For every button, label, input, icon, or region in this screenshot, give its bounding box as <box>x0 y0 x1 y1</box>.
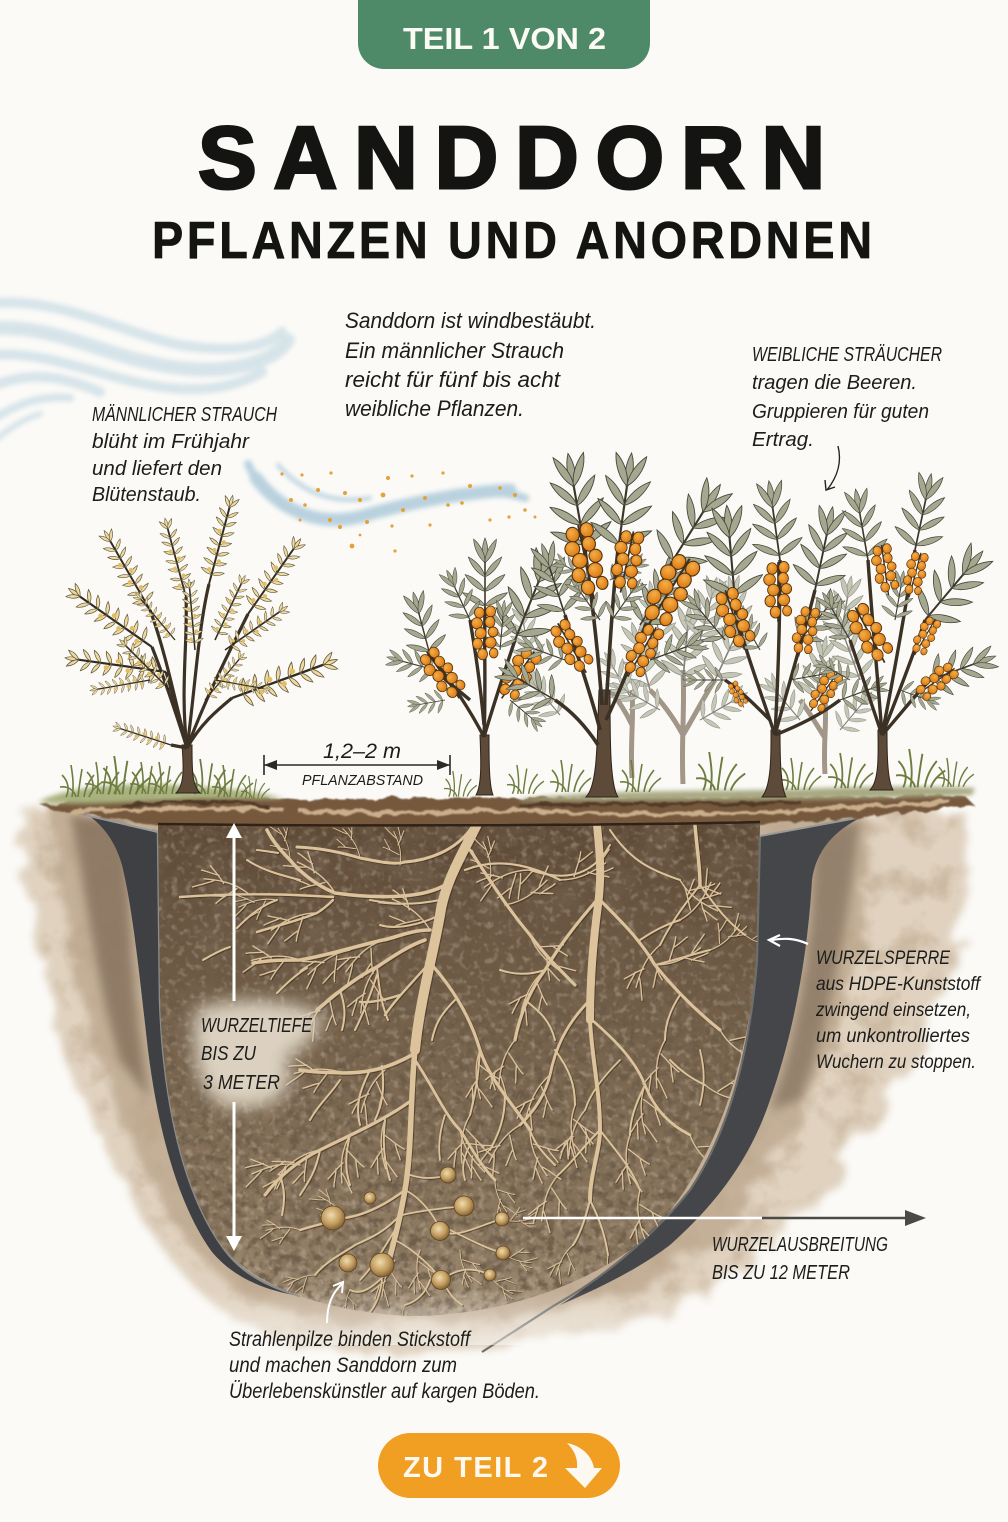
root depth label: WURZELTIEFE <box>201 1015 313 1037</box>
text: wind pollination note: Ein männlicher Strauch <box>345 338 564 363</box>
button: to part 2: ZU TEIL 2 <box>403 1452 548 1484</box>
fine rootlets <box>190 817 781 1322</box>
spacing dimension <box>264 740 450 789</box>
button: to part 2 <box>378 1433 620 1498</box>
badge: part 1 of 2 <box>358 0 650 69</box>
arrow: to root barrier <box>769 935 808 946</box>
soil shadow beside barriers <box>70 815 860 1110</box>
text: nodules note: Überlebenskünstler auf kargen Böden. <box>229 1380 540 1403</box>
text: root barrier note <box>815 948 982 1073</box>
spacing dimension: PFLANZABSTAND <box>302 772 423 789</box>
outer soil grain <box>34 811 959 1336</box>
text: male shrub note: und liefert den <box>92 458 222 480</box>
bottom fade of pit <box>150 1290 710 1345</box>
shrub 2 <box>488 448 747 797</box>
text: root barrier note: zwingend einsetzen, <box>815 1000 971 1021</box>
shrub 1 <box>382 538 580 795</box>
text: nodules note: und machen Sanddorn zum <box>229 1354 457 1377</box>
root depth label <box>194 823 321 1251</box>
text: female shrubs note: Gruppieren für guten <box>752 401 929 423</box>
text: wind pollination note: reicht für fünf bis acht <box>345 367 561 392</box>
outer soil wash <box>22 810 968 1352</box>
inner soil wash <box>52 812 869 1323</box>
background shrubs <box>503 572 885 784</box>
arrow: root spread <box>523 1210 926 1226</box>
grass tufts <box>60 749 974 798</box>
ground surface <box>38 784 975 826</box>
text: root spread: BIS ZU 12 METER <box>712 1262 850 1284</box>
text: root barrier note: WURZELSPERRE <box>816 948 950 969</box>
text: nodules note: Strahlenpilze binden Stickstoff <box>229 1328 472 1351</box>
root depth label: BIS ZU <box>201 1043 256 1065</box>
text: female shrubs note: WEIBLICHE STRÄUCHER <box>752 344 942 366</box>
nodule branches <box>370 1175 503 1312</box>
soil grain texture <box>150 815 770 1325</box>
middle and right branches <box>415 830 745 1255</box>
text: root barrier note: aus HDPE-Kunststoff <box>816 974 982 995</box>
left branches <box>180 830 470 1292</box>
text: nodules note <box>229 1328 540 1403</box>
text: root barrier note: Wuchern zu stoppen. <box>816 1052 976 1073</box>
subtitle: PFLANZEN UND ANORDNEN <box>152 212 872 270</box>
title: SANDDORN <box>198 108 825 207</box>
spacing dimension: 1,2–2 m <box>323 740 401 763</box>
text: female shrubs note <box>752 344 942 451</box>
root depth label: 3 METER <box>203 1072 280 1094</box>
badge: part 1 of 2: TEIL 1 VON 2 <box>403 21 606 56</box>
text: male shrub note <box>92 404 277 506</box>
main roots <box>385 822 700 1275</box>
text: wind pollination note <box>345 308 596 421</box>
text: female shrubs note: Ertrag. <box>752 429 814 451</box>
wind swirl top left <box>0 303 288 440</box>
text: male shrub note: MÄNNLICHER STRAUCH <box>92 404 277 426</box>
nitrogen nodules <box>321 1167 510 1290</box>
text: root spread: WURZELAUSBREITUNG <box>712 1234 888 1256</box>
text: wind pollination note: weibliche Pflanzen. <box>345 396 524 421</box>
male shrub <box>61 492 343 793</box>
text: root spread <box>712 1234 888 1284</box>
arrow: to nodules <box>327 1282 343 1323</box>
text: root barrier note: um unkontrolliertes <box>816 1026 970 1047</box>
shrub 4 <box>807 468 1006 790</box>
soil pit <box>158 822 760 1316</box>
text: female shrubs note: tragen die Beeren. <box>752 372 917 394</box>
text: wind pollination note: Sanddorn ist windbestäubt. <box>345 308 596 333</box>
wind with pollen <box>248 464 536 553</box>
arrow: to female shrubs <box>825 446 840 490</box>
root barrier left <box>72 812 300 1296</box>
shrub 3 <box>671 477 893 797</box>
root barrier right <box>482 817 862 1352</box>
text: male shrub note: Blütenstaub. <box>92 484 201 506</box>
text: male shrub note: blüht im Frühjahr <box>92 431 250 453</box>
icon: curved down arrow <box>565 1443 602 1488</box>
root system <box>180 817 781 1322</box>
female shrubs <box>382 448 1006 797</box>
